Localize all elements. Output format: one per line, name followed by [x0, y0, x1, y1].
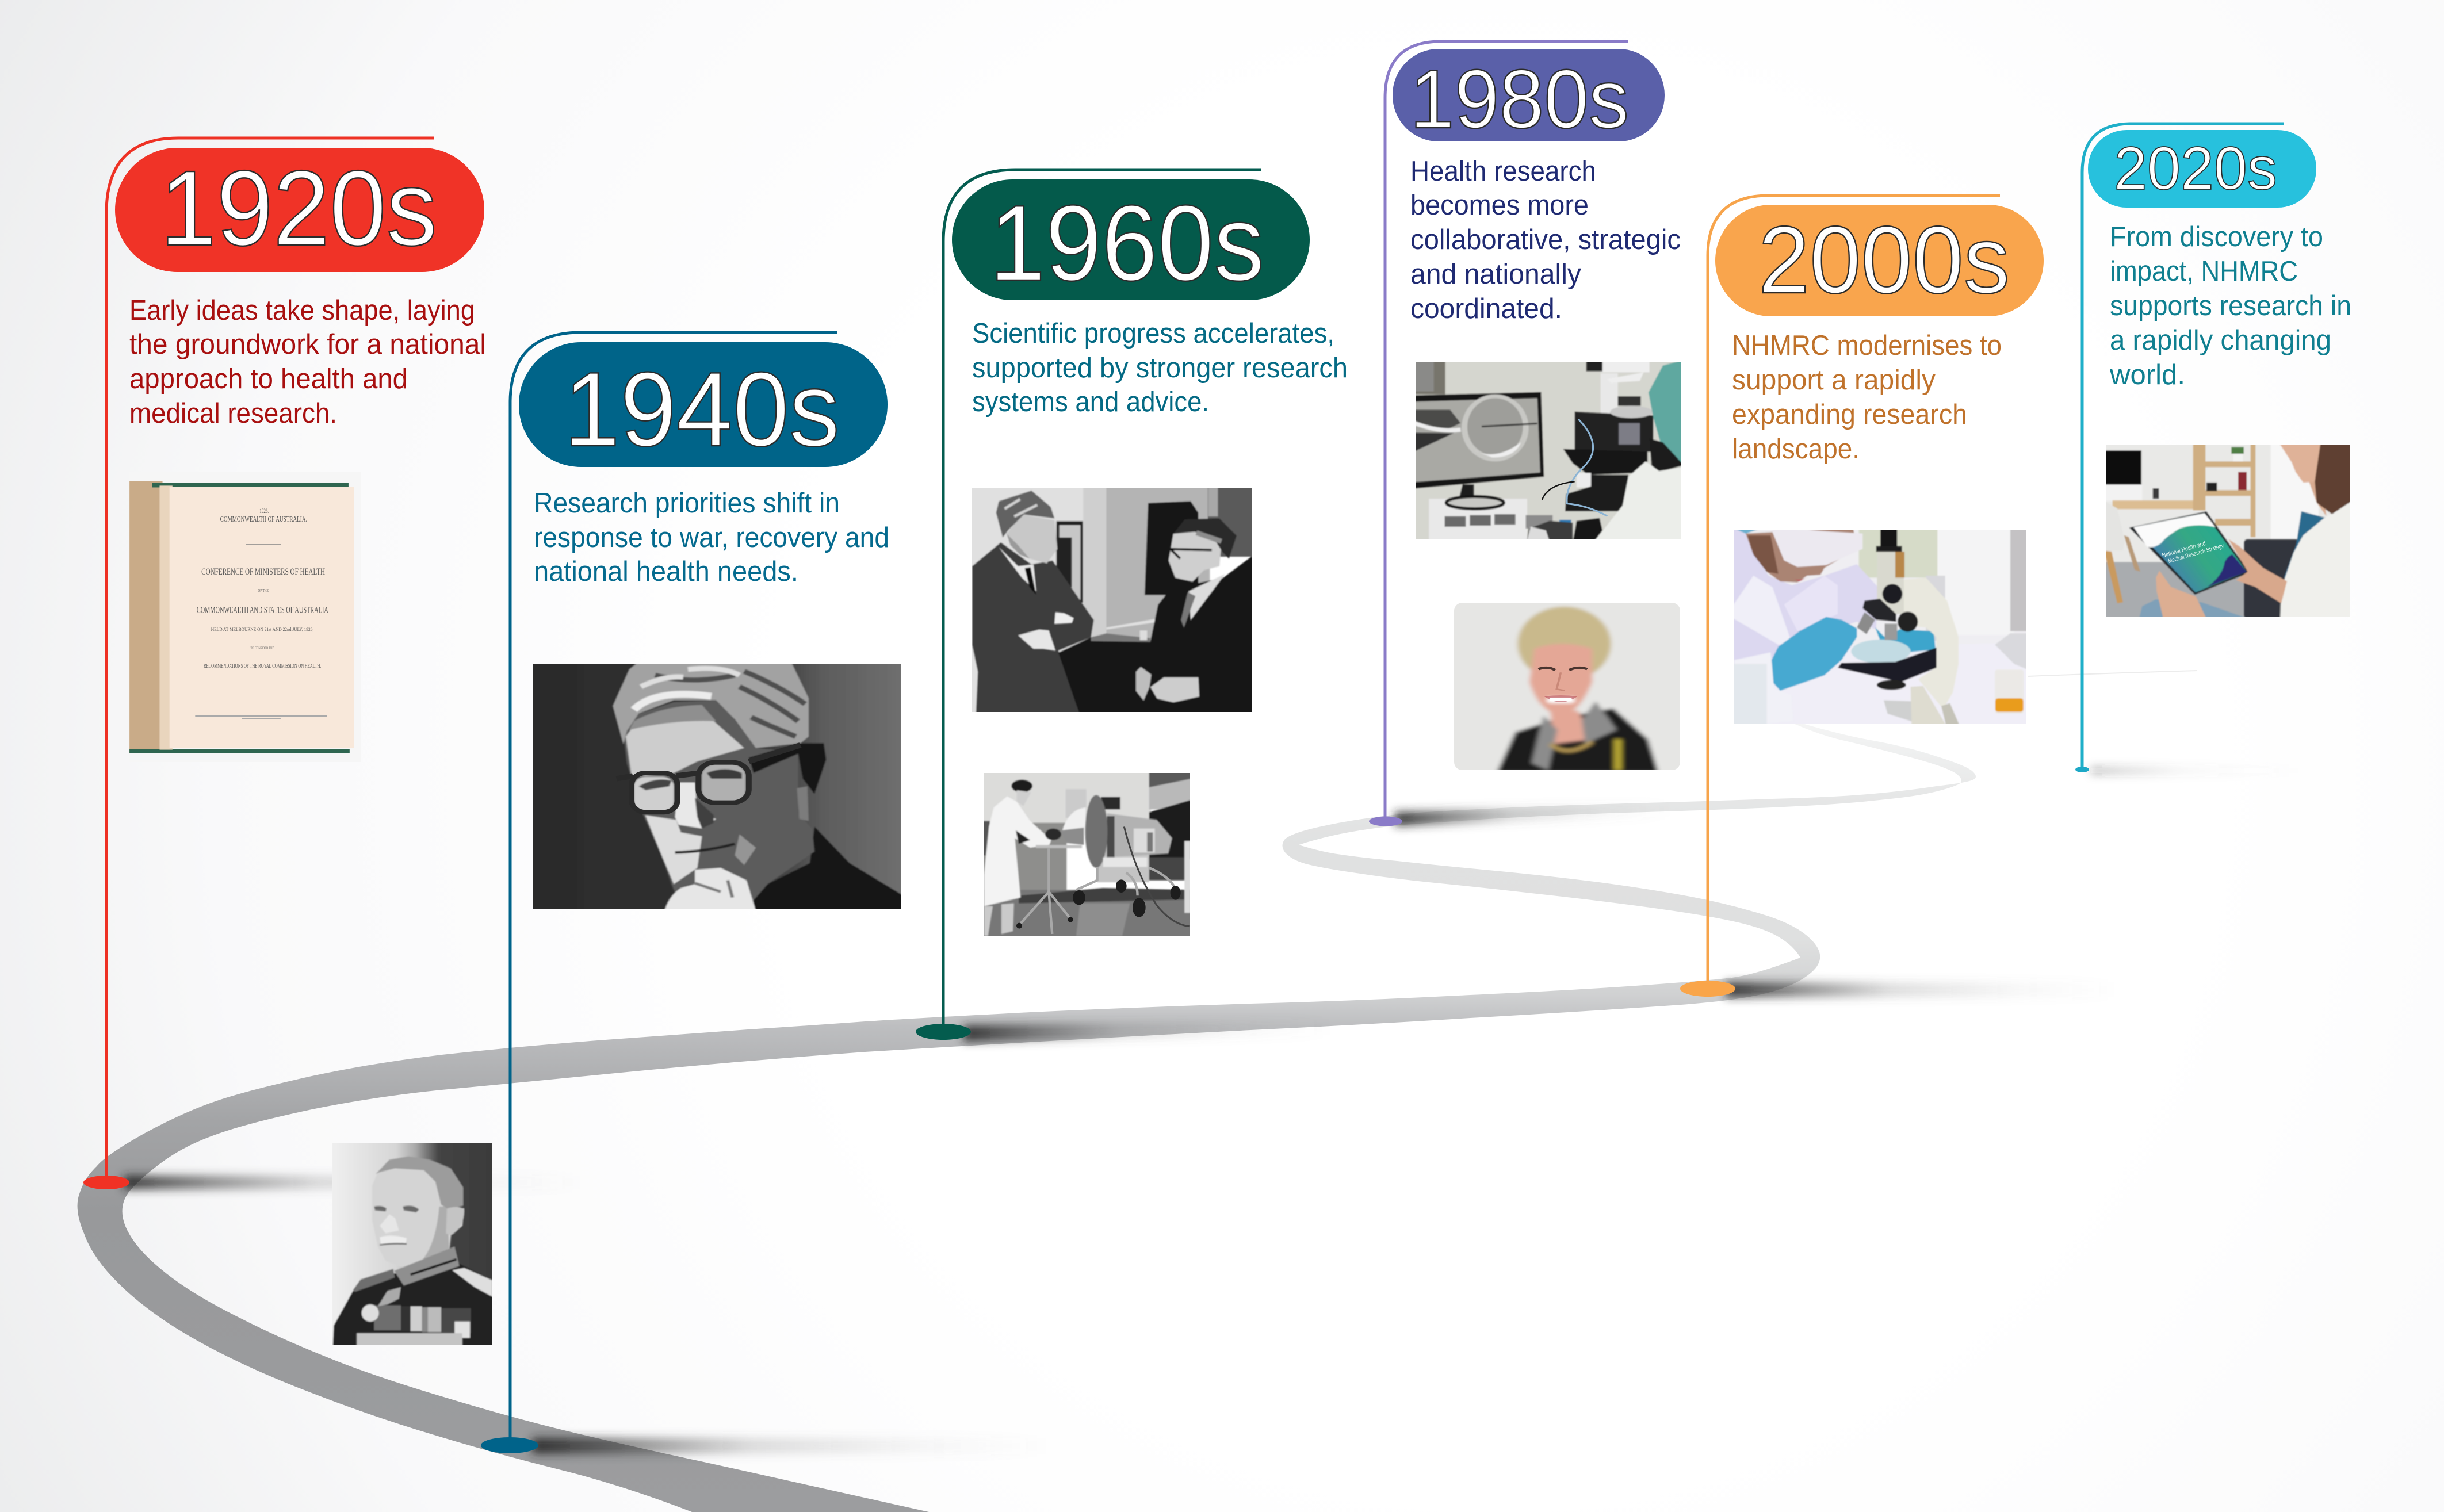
decade pill: 1980s [1410, 52, 1629, 146]
photo: two men in conversation [970, 486, 1254, 714]
description: Scientific progress accelerates, [972, 318, 1334, 349]
milestone 2020s [2075, 124, 2352, 772]
connector and marker [83, 138, 434, 1189]
description: collaborative, strategic [1410, 224, 1681, 255]
description: medical research. [129, 398, 337, 429]
photo: 1926 conference report: HELD AT MELBOURNE ON 21st AND 22nd JULY, 1926, [211, 626, 313, 632]
description: Health research [1410, 156, 1596, 187]
connector and marker [916, 170, 1261, 1040]
description: becomes more [1410, 190, 1589, 221]
description: world. [2109, 359, 2185, 391]
connector and marker [2075, 124, 2284, 772]
milestone 1940s [481, 332, 906, 1453]
connector and marker [481, 332, 837, 1453]
description: supports research in [2110, 290, 2351, 321]
connector and marker [1369, 41, 1628, 826]
report title on tablet: National Health and [2161, 540, 2206, 559]
milestone 1980s [1369, 41, 1686, 826]
description: national health needs. [534, 556, 798, 587]
milestone 2000s [1680, 196, 2044, 997]
description: impact, NHMRC [2110, 256, 2298, 287]
faint thread behind the 2020s marker [2028, 671, 2197, 676]
winding timeline ribbon [78, 716, 1976, 1512]
milestone shadows on the ribbon [124, 767, 2304, 1454]
description: NHMRC modernises to [1732, 330, 2002, 361]
photo: microscope and embryo on monitor [1414, 360, 1684, 542]
description: a rapidly changing [2110, 325, 2331, 356]
description: coordinated. [1410, 293, 1562, 324]
description: and nationally [1410, 259, 1581, 290]
photo: woman reading report on tablet [2104, 443, 2352, 619]
photo: 1926 conference report: COMMONWEALTH AND STATES OF AUSTRALIA [197, 606, 328, 615]
photo: portrait in military uniform [330, 1142, 495, 1349]
description: landscape. [1732, 434, 1860, 465]
description: systems and advice. [972, 386, 1209, 418]
connector and marker [1680, 196, 2000, 997]
description: approach to health and [129, 363, 408, 395]
milestone 1920s [83, 138, 495, 1349]
description: response to war, recovery and [534, 522, 889, 553]
photo: 1926 conference report: COMMONWEALTH OF AUSTRALIA. [220, 515, 307, 523]
description: Early ideas take shape, laying [129, 295, 475, 326]
description: Research priorities shift in [534, 488, 840, 519]
photo: scientist at microscope [1732, 528, 2029, 727]
decade pill [2088, 130, 2316, 208]
photo: portrait with glasses [529, 660, 906, 913]
photo: 1926 conference report: TO CONSIDER THE [251, 646, 274, 650]
decade pill: 1960s [989, 183, 1264, 303]
decade pill: 1920s [160, 149, 437, 268]
description: support a rapidly [1732, 365, 1936, 396]
decade pill: 2000s [1758, 207, 2010, 313]
photo: 1926 conference report: RECOMMENDATIONS OF THE ROYAL COMMISSION ON HEALTH. [204, 663, 321, 669]
photo: 1926 conference report [129, 472, 361, 762]
decade pill: 1940s [564, 350, 840, 468]
description: From discovery to [2110, 221, 2323, 252]
description: supported by stronger research [972, 353, 1348, 384]
photo: nurse with iron lung [982, 771, 1191, 938]
photo: smiling woman portrait [1449, 599, 1686, 775]
report title on tablet: Medical Research Strategy [2167, 542, 2225, 565]
photo: 1926 conference report: CONFERENCE OF MINISTERS OF HEALTH [201, 567, 325, 577]
milestone 1960s [916, 170, 1348, 1040]
report title on tablet [2161, 535, 2225, 566]
decade pill: 2020s [2114, 135, 2277, 202]
description: expanding research [1732, 399, 1967, 430]
photo: 1926 conference report: OF THE [258, 588, 269, 593]
description: the groundwork for a national [129, 329, 486, 360]
photo: 1926 conference report: 1926. [259, 508, 269, 515]
